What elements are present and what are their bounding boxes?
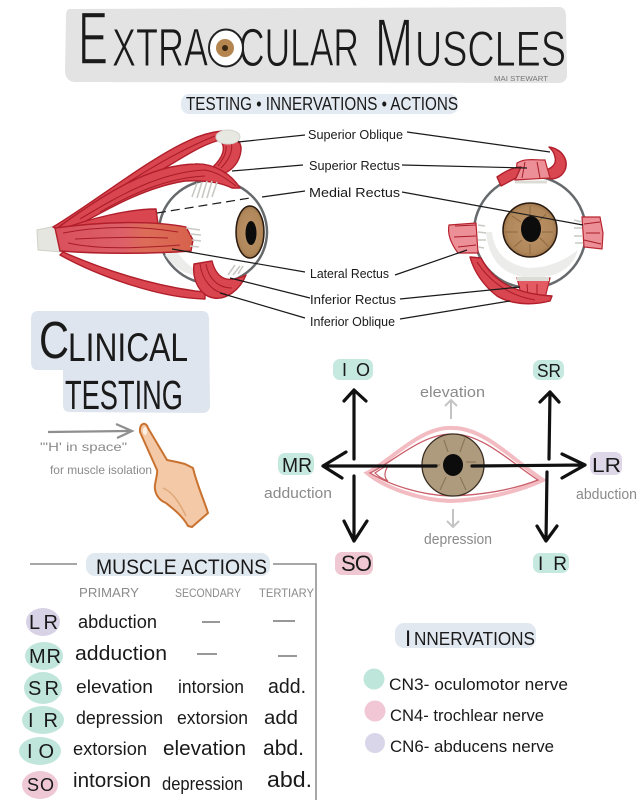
badge: IO: IO — [342, 360, 370, 380]
muscle actions table — [19, 553, 316, 800]
arrow: gray pointing to finger — [48, 424, 132, 438]
title text: CULAR — [239, 18, 359, 78]
column headers: PRIMARY — [79, 585, 139, 600]
H pattern diagram — [264, 359, 637, 576]
legend: CN6: CN6- abducens nerve — [390, 737, 554, 756]
label: adduction: adduction — [264, 485, 332, 502]
row: SO: depression — [162, 774, 243, 794]
label: abduction: abduction — [576, 486, 637, 503]
clinical testing heading: C — [39, 312, 69, 370]
arrow: SR — [540, 392, 559, 459]
row: SR: add. — [268, 676, 306, 698]
badge: IR: IR — [538, 554, 567, 575]
medial rectus muscle — [60, 209, 158, 236]
left eye lateral view with muscles — [37, 130, 267, 299]
row: MR: adduction — [75, 643, 167, 665]
clinical testing heading — [31, 311, 210, 418]
inferior oblique band — [470, 257, 552, 304]
subtitle: TESTING • INNERVATIONS • ACTIONS — [186, 94, 458, 114]
label: Medial Rectus: Medial Rectus — [309, 186, 400, 200]
innervations heading: I — [405, 626, 411, 651]
row: IO: elevation — [163, 738, 246, 760]
column headers — [79, 585, 314, 600]
legend: CN3 — [364, 668, 568, 694]
title text — [78, 0, 566, 81]
arrow: depression — [447, 509, 459, 527]
inferior rectus insertion — [517, 278, 550, 298]
legend: CN3: CN3- oculomotor nerve — [389, 675, 568, 694]
row: SO: abd. — [267, 767, 312, 792]
badge: MR: MR — [282, 455, 312, 477]
tendon fan — [192, 181, 217, 198]
row: SO: intorsion — [73, 770, 151, 792]
table heading: MUSCLE ACTIONS — [96, 556, 267, 579]
row: IO: abd. — [263, 737, 304, 760]
label: depression: depression — [424, 531, 492, 548]
legend: CN4: CN4- trochlear nerve — [390, 706, 544, 725]
muscle labels and leader lines — [157, 128, 583, 329]
lateral rectus insertion — [449, 223, 486, 253]
innervations legend — [364, 623, 568, 756]
row: IO: extorsion — [73, 739, 147, 759]
label: Inferior Oblique: Inferior Oblique — [310, 315, 395, 329]
row: IO: IO — [27, 741, 54, 763]
author credit: MAI STEWART — [494, 74, 548, 83]
eyeball — [159, 180, 267, 284]
superior rectus muscle — [56, 164, 240, 234]
innervations heading — [395, 623, 536, 651]
right eye front view with muscles — [449, 147, 603, 304]
row: LR: LR — [29, 612, 58, 634]
eye almond — [367, 428, 543, 501]
row: IR: depression — [76, 708, 163, 728]
clinical testing heading: LINICAL — [68, 326, 188, 370]
row: SR: elevation — [76, 677, 153, 697]
row: SR — [24, 672, 306, 704]
row: IO — [19, 737, 304, 765]
label: Lateral Rectus: Lateral Rectus — [310, 267, 389, 281]
arrow: IO — [344, 390, 366, 459]
innervations heading: NNERVATIONS — [414, 629, 535, 649]
label: Inferior Rectus: Inferior Rectus — [310, 293, 396, 307]
note: muscle isolation: for muscle isolation — [50, 463, 152, 477]
lateral rectus muscle — [55, 223, 201, 253]
title text: M — [375, 5, 413, 81]
badge: IO — [333, 359, 373, 380]
table frame — [30, 564, 316, 800]
row: SO — [22, 767, 312, 799]
column headers: SECONDARY — [175, 586, 241, 600]
row: LR — [26, 608, 295, 636]
icon: pointing hand — [140, 424, 208, 527]
row: IR: IR — [28, 710, 58, 732]
legend: CN4 — [364, 700, 544, 725]
title text: XTRA — [112, 18, 208, 78]
badge: SR: SR — [537, 361, 561, 381]
arrow: IR — [537, 472, 557, 541]
medial rectus insertion — [574, 217, 603, 249]
horizontal double arrow — [323, 452, 585, 478]
row: SR: SR — [28, 678, 59, 700]
label: elevation: elevation — [420, 384, 485, 401]
clinical testing heading: TESTING — [65, 372, 183, 418]
leader lines — [157, 132, 583, 319]
inferior oblique muscle — [194, 261, 246, 298]
badge: SO: SO — [341, 551, 372, 576]
H in space arrow and note — [40, 424, 152, 477]
inferior rectus muscle — [60, 252, 205, 299]
label: Superior Rectus: Superior Rectus — [309, 159, 400, 173]
row: MR — [25, 642, 297, 670]
row: SR: intorsion — [178, 677, 244, 697]
icon: title eye — [209, 30, 243, 66]
row: MR: MR — [29, 646, 61, 668]
row: LR: abduction — [78, 612, 157, 632]
row: IR — [22, 706, 298, 734]
superior oblique muscle — [53, 130, 241, 231]
title text: USCLES — [415, 21, 566, 77]
arrow: SO — [344, 476, 367, 541]
label: Superior Oblique: Superior Oblique — [308, 128, 403, 142]
badge: LR: LR — [592, 455, 621, 477]
superior oblique hook — [543, 147, 566, 179]
note: H in space: "'H' in space" — [40, 440, 127, 454]
row: IR: extorsion — [177, 708, 248, 728]
arrow: elevation — [445, 400, 457, 419]
column headers: TERTIARY — [259, 586, 314, 600]
title banner — [65, 0, 567, 83]
superior rectus insertion — [497, 160, 550, 186]
eyeball — [474, 176, 586, 288]
row: IR: add — [264, 708, 298, 729]
row: SO: SO — [27, 775, 54, 795]
tendon stub — [37, 226, 62, 252]
